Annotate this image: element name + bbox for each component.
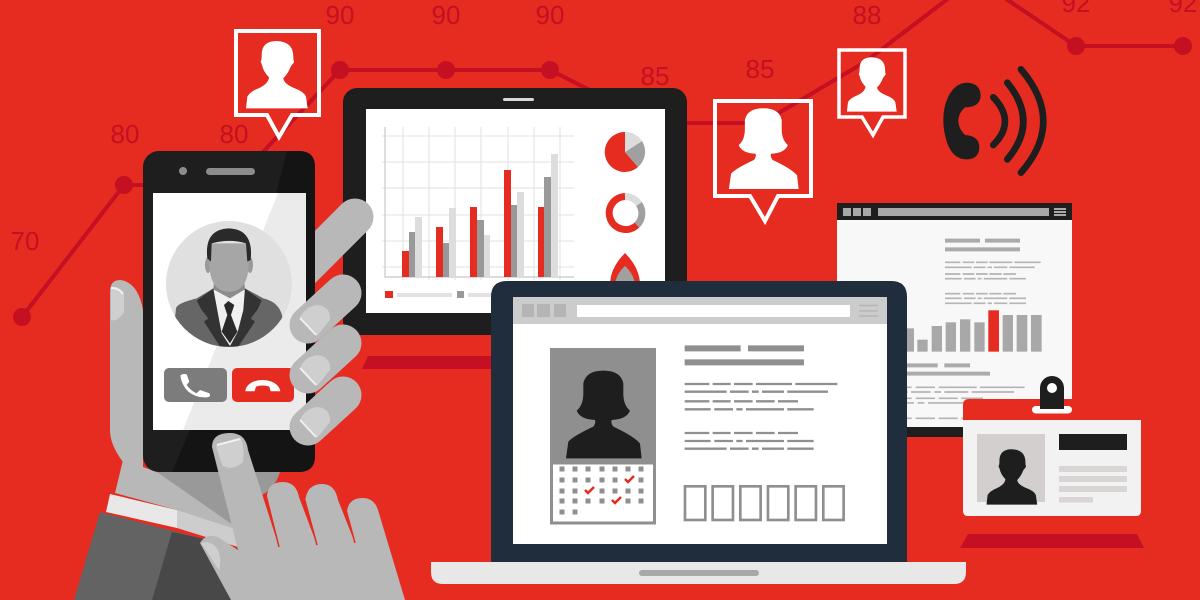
nail highlights <box>300 318 316 437</box>
chart values: 80 <box>111 119 139 149</box>
chart points <box>13 37 1192 326</box>
holding hand thumb <box>110 280 143 472</box>
icon: ringing phone <box>943 69 1043 173</box>
thumb nail highlight <box>111 288 123 294</box>
palm <box>115 460 280 532</box>
finger two <box>308 293 343 325</box>
calendar <box>552 463 654 523</box>
phone body <box>143 151 315 472</box>
avatar circle <box>166 221 292 347</box>
avatar man <box>175 228 282 347</box>
chart values: 90 <box>432 0 460 30</box>
phone camera <box>179 167 187 175</box>
tablet speaker <box>503 98 534 101</box>
laptop screen <box>513 297 887 544</box>
browser bar chart <box>903 310 1042 352</box>
pie chart <box>605 132 645 172</box>
index nail highlight <box>217 439 240 445</box>
profile text <box>685 348 837 449</box>
badge red header <box>963 399 1072 420</box>
hand thumb nail <box>201 542 220 570</box>
laptop trackpad notch <box>639 570 759 576</box>
chart values: 85 <box>746 54 774 84</box>
sleeve <box>74 512 240 600</box>
tablet screen <box>366 109 665 313</box>
thumb nail <box>111 287 124 320</box>
badge clip hole <box>1047 383 1057 393</box>
laptop lid <box>491 281 907 562</box>
tablet chart grid <box>382 127 574 280</box>
chart values: 70 <box>11 226 39 256</box>
hand palm and fingers <box>200 433 405 600</box>
holding hand fingers <box>300 293 343 438</box>
badge name bar <box>1059 434 1127 450</box>
id badge <box>963 376 1141 516</box>
tablet <box>343 88 687 335</box>
chart values: 85 <box>641 61 669 91</box>
nails <box>300 305 330 438</box>
woman silhouette <box>566 371 642 458</box>
tablet stand shadow <box>362 356 600 369</box>
shirt cuff <box>106 494 238 547</box>
badge photo <box>977 434 1045 502</box>
tablet body <box>343 88 687 335</box>
accept call button <box>164 368 227 402</box>
laptop toolbar <box>513 297 887 324</box>
input boxes <box>685 486 844 520</box>
badge card <box>963 420 1141 516</box>
calendar dots <box>560 466 644 514</box>
decline call button <box>232 368 294 402</box>
finger three <box>308 343 343 375</box>
laptop <box>431 281 966 584</box>
chart values: 80 <box>220 119 248 149</box>
calendar checks <box>585 476 634 503</box>
line chart <box>11 0 1197 326</box>
browser text and headings <box>907 241 1041 418</box>
chart values: 90 <box>326 0 354 30</box>
browser page <box>837 220 1072 427</box>
pin: man large <box>236 31 319 137</box>
tablet chart axes <box>385 127 574 277</box>
browser toolbar <box>843 208 1066 216</box>
id card shadow <box>960 534 1144 548</box>
phone body shading <box>172 151 315 472</box>
pin: woman <box>715 101 811 221</box>
donut chart <box>609 196 642 229</box>
tablet bar chart <box>402 154 558 277</box>
laptop base <box>431 562 966 584</box>
chart line <box>22 0 1183 317</box>
badge clip slot <box>1032 406 1072 414</box>
smartphone <box>143 151 315 472</box>
hand: top finger behind phone <box>300 217 355 272</box>
browser window: report <box>837 203 1072 437</box>
teardrop chart <box>610 253 640 285</box>
index nail <box>216 438 244 468</box>
finger four <box>308 395 343 427</box>
tablet chart legend <box>385 291 498 298</box>
pointing hand <box>200 433 405 600</box>
phone screen glare <box>183 193 306 430</box>
pin: man small <box>839 50 905 135</box>
phone screen <box>153 193 306 430</box>
chart values: 88 <box>853 0 881 30</box>
chart values <box>11 0 1197 256</box>
phone speaker <box>206 168 255 175</box>
chart values: 90 <box>536 0 564 30</box>
badge details <box>1059 466 1127 502</box>
browser frame <box>837 203 1072 437</box>
profile photo <box>550 348 656 464</box>
badge clip <box>1040 376 1064 409</box>
badge man silhouette <box>987 449 1037 505</box>
red gaps between fingers <box>266 495 355 547</box>
